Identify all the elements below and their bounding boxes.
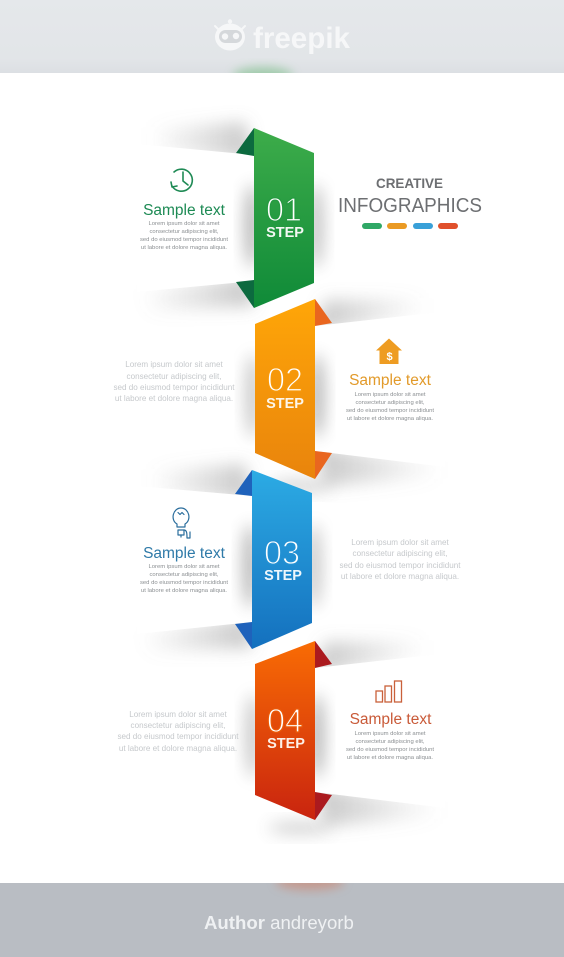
green band — [254, 128, 314, 308]
step label: STEP — [266, 225, 304, 241]
side note: step 4 — [117, 710, 239, 753]
header bar with freepik logo — [0, 0, 564, 73]
body text: consectetur adipiscing elit, — [149, 229, 219, 235]
side note: step 3: sed do eiusmod tempor incididunt — [339, 561, 461, 570]
side note: step 2: sed do eiusmod tempor incididunt — [113, 383, 235, 392]
body text: ut labore et dolore magna aliqua. — [141, 588, 227, 594]
author credit: Author andreyorb — [204, 912, 354, 933]
body text: consectetur adipiscing elit, — [355, 739, 425, 745]
folded flaps — [236, 128, 254, 308]
body text: consectetur adipiscing elit, — [355, 400, 425, 406]
body text: sed do eiusmod tempor incididunt — [140, 580, 228, 586]
body text: Lorem ipsum dolor sit amet — [354, 392, 426, 398]
red-orange band — [255, 641, 315, 820]
folded flaps — [235, 470, 252, 649]
orange band — [255, 299, 315, 479]
step 1 panel — [137, 122, 323, 312]
heading: Sample text — [350, 711, 432, 728]
icon: bar chart — [376, 681, 402, 702]
body text: ut labore et dolore magna aliqua. — [347, 416, 433, 422]
side note: step 3: Lorem ipsum dolor sit amet — [351, 538, 450, 547]
body text: sed do eiusmod tempor incididunt — [346, 747, 434, 753]
heading: Sample text — [349, 372, 432, 389]
heading: Sample text — [143, 202, 226, 219]
body text — [346, 392, 434, 422]
side note: step 2: Lorem ipsum dolor sit amet — [125, 360, 224, 369]
step number: 01 — [266, 191, 302, 228]
body text: sed do eiusmod tempor incididunt — [346, 408, 434, 414]
step label: STEP — [266, 396, 304, 412]
step 4 panel — [246, 640, 445, 834]
heading: Sample text — [143, 545, 226, 562]
blue band — [252, 470, 312, 649]
icon: house with dollar — [376, 338, 402, 364]
side note: step 4: Lorem ipsum dolor sit amet — [129, 710, 228, 719]
folded flaps — [315, 299, 332, 479]
side note: step 2: consectetur adipiscing elit, — [127, 372, 221, 381]
side note: step 4: sed do eiusmod tempor incididunt — [117, 732, 239, 741]
side note: step 3: consectetur adipiscing elit, — [353, 549, 447, 558]
step label: STEP — [264, 568, 302, 584]
body text: consectetur adipiscing elit, — [149, 572, 219, 578]
colour pills — [362, 223, 458, 229]
step 2 panel — [246, 298, 445, 492]
icon: clock — [171, 169, 192, 191]
body text: Lorem ipsum dolor sit amet — [354, 731, 426, 737]
step number: 02 — [267, 361, 303, 398]
step label: STEP — [267, 736, 305, 752]
footer bar — [0, 883, 564, 957]
side note: step 4: consectetur adipiscing elit, — [131, 721, 225, 730]
title block — [338, 175, 482, 229]
side note: step 4: ut labore et dolore magna aliqua. — [119, 744, 237, 753]
step number: 04 — [267, 702, 303, 739]
icon: light bulb — [173, 508, 190, 538]
body text: Lorem ipsum dolor sit amet — [148, 221, 220, 227]
side note: step 2: ut labore et dolore magna aliqua. — [115, 394, 233, 403]
body text: Lorem ipsum dolor sit amet — [148, 564, 220, 570]
title line 2: INFOGRAPHICS — [338, 194, 482, 217]
step 3 panel — [137, 464, 321, 652]
step number: 03 — [264, 534, 300, 571]
folded flaps — [315, 641, 332, 820]
icon: house with dollar: $ — [386, 351, 393, 363]
side note: step 2 — [113, 360, 235, 403]
title line 1: CREATIVE — [376, 175, 443, 191]
icon: freepik robot — [215, 19, 245, 50]
body text: ut labore et dolore magna aliqua. — [347, 755, 433, 761]
body text — [346, 731, 434, 761]
body text: ut labore et dolore magna aliqua. — [141, 245, 227, 251]
freepik wordmark: freepik — [253, 22, 350, 55]
body text: sed do eiusmod tempor incididunt — [140, 237, 228, 243]
side note: step 3 — [339, 538, 461, 581]
side note: step 3: ut labore et dolore magna aliqua. — [341, 572, 459, 581]
body text — [140, 221, 228, 251]
body text — [140, 564, 228, 594]
